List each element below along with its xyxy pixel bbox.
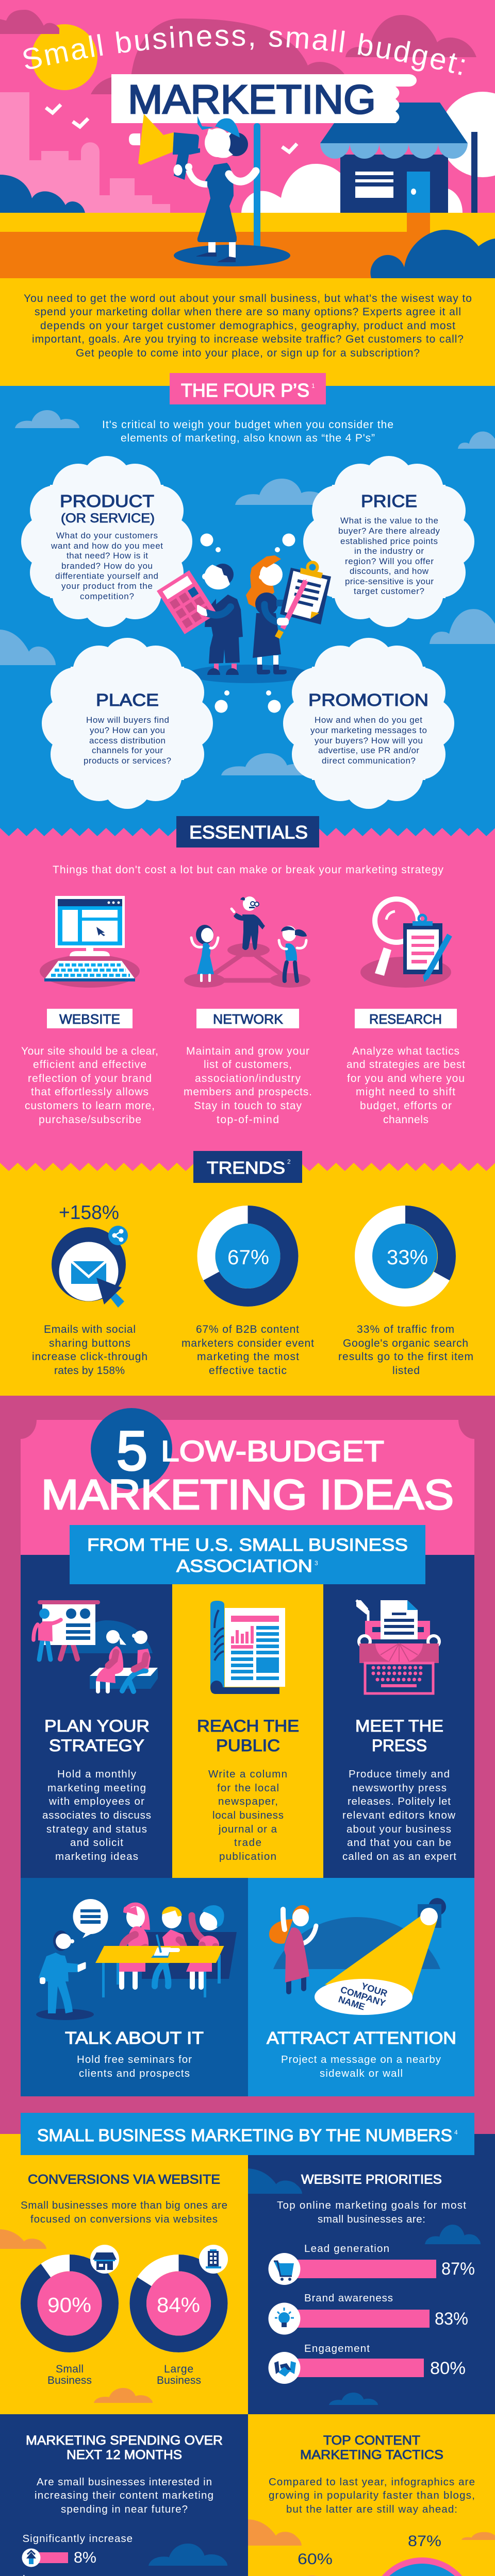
text: spending: Are small businesses interested in	[37, 2476, 212, 2488]
text: research: Analyze what tactics	[352, 1045, 459, 1057]
sub heading: ASSOCIATION	[176, 1556, 312, 1576]
icon: presentation	[34, 1600, 158, 1691]
text: website	[21, 1045, 158, 1126]
birds	[46, 105, 297, 152]
section: by the numbers	[0, 2113, 495, 2576]
heading: the four P's: 1	[311, 382, 315, 389]
cloud: product: that need? How is it	[67, 551, 148, 561]
white clouds behind house	[241, 92, 495, 213]
text: network: Maintain and grow your	[186, 1045, 309, 1057]
label: large business	[157, 2363, 201, 2386]
cloud: promotion: your marketing messages to	[310, 725, 427, 735]
cloud: product: (OR SERVICE)	[61, 511, 155, 526]
sub heading	[70, 1525, 425, 1584]
text: network: Stay in touch to stay	[194, 1100, 302, 1112]
heading: trends: 2	[287, 1158, 291, 1165]
donut chart: 67%: 67%	[227, 1246, 269, 1269]
caption: Google	[338, 1324, 473, 1377]
text: network: top-of-mind	[217, 1114, 279, 1126]
text: priorities: small businesses are:	[318, 2213, 425, 2225]
idea: plan your strategy: marketing meeting	[47, 1782, 146, 1794]
cloud: price: price-sensitive is your	[345, 577, 434, 586]
bubble chart: blogs: 87%	[408, 2533, 441, 2550]
heading: the four P's	[170, 373, 326, 404]
title main word: MARKETING	[128, 76, 376, 122]
text: priorities	[277, 2199, 466, 2225]
banner: by the numbers: 4	[454, 2129, 458, 2136]
city skyline	[0, 92, 170, 213]
spotlight scene: YOUR	[360, 1980, 389, 1999]
idea: reach the public: publication	[219, 1851, 276, 1862]
bar: lead generation	[268, 2243, 475, 2285]
bubble chart: infographics: 60%	[298, 2551, 333, 2568]
text: talk about it: clients and prospects	[79, 2067, 190, 2079]
idea: meet the press: called on as an expert	[342, 1851, 456, 1862]
idea: meet the press: releases. Politely let	[348, 1795, 451, 1807]
text: conversions: Small businesses more than big ones are	[21, 2199, 227, 2211]
label: large business: Business	[157, 2375, 201, 2386]
donut chart: small business: 90%	[47, 2293, 91, 2317]
cloud: price: in the industry or	[354, 546, 424, 556]
icon: network	[184, 896, 310, 988]
stat: +158%: +158%	[59, 1202, 119, 1224]
shop	[320, 103, 468, 213]
text: network: association/industry	[195, 1073, 301, 1084]
caption: emails: Emails with social	[44, 1324, 136, 1335]
icon: office badge	[199, 2245, 228, 2274]
text: tactics	[269, 2476, 475, 2515]
intro text: important, goals. Are you trying to increase website traffic? Get customers to call?	[32, 333, 464, 345]
spotlight scene: NAME	[337, 1994, 366, 2012]
idea: plan your strategy: marketing ideas	[55, 1851, 138, 1862]
cloud: product	[21, 456, 192, 627]
heading: priorities: WEBSITE PRIORITIES	[301, 2172, 442, 2187]
cloud: place: you? How can you	[90, 725, 165, 735]
banner: by the numbers: SMALL BUSINESS MARKETING BY THE NUMBERS	[37, 2126, 452, 2145]
number circle	[91, 1408, 172, 1489]
cloud: price: established price points	[340, 536, 438, 546]
section: essentials	[0, 816, 495, 1163]
text: website: reflection of your brand	[28, 1073, 152, 1084]
donut chart: 67%	[206, 1215, 289, 1297]
essentials subtitle: Things that don't cost a lot but can make or break your marketing strategy	[53, 864, 444, 876]
lamp post	[471, 132, 477, 213]
heading: tactics: TOP CONTENT	[323, 2433, 420, 2448]
blue clouds	[142, 2544, 248, 2576]
bar: significantly increase: 8%	[74, 2549, 96, 2566]
cloud: product: differentiate yourself and	[55, 571, 158, 581]
caption: emails: increase click-through	[32, 1351, 147, 1363]
icon: research	[360, 899, 451, 988]
idea: reach the public: PUBLIC	[216, 1736, 280, 1755]
idea: plan your strategy: and solicit	[70, 1837, 123, 1849]
icon: email	[52, 1226, 128, 1308]
caption: Google: Google's organic search	[343, 1337, 468, 1349]
heading: essentials	[176, 816, 319, 848]
cloud: promotion: How and when do you get	[315, 715, 422, 725]
idea: reach the public: REACH THE	[197, 1717, 299, 1735]
text: website: customers to learn more,	[25, 1100, 155, 1112]
cloud: place: products or services?	[84, 756, 171, 766]
label: network: NETWORK	[213, 1011, 284, 1027]
cloud: product: PRODUCT	[60, 492, 154, 511]
cloud: product: branded? How do you	[61, 561, 153, 571]
idea: meet the press: Produce timely and	[349, 1768, 450, 1780]
text: tactics: but the latter are still way ahead:	[286, 2503, 457, 2515]
bar: brand awareness: Brand awareness	[304, 2292, 393, 2304]
four P's subtitle	[102, 419, 393, 444]
intro text	[24, 293, 472, 359]
idea: plan your strategy: strategy and status	[46, 1823, 147, 1835]
idea: meet the press: PRESS	[372, 1736, 427, 1755]
cloud: place: access distribution	[89, 736, 166, 745]
heading: tactics	[300, 2433, 443, 2462]
panel: marketing spending	[0, 2414, 248, 2576]
cloud: top left	[0, 10, 59, 34]
cloud: price: region? Will you offer	[345, 556, 434, 566]
sub heading: FROM THE U.S. SMALL BUSINESS	[87, 1535, 408, 1555]
heading: talk about it: TALK ABOUT IT	[65, 2028, 204, 2047]
panel: content tactics	[248, 2414, 495, 2576]
text: conversions: focused on conversions via websites	[30, 2213, 218, 2225]
cloud: place: How will buyers find	[86, 715, 169, 725]
text: research	[346, 1045, 465, 1126]
people shadow	[188, 665, 310, 683]
text: website: that effortlessly allows	[31, 1086, 148, 1098]
bar: brand awareness: 83%	[435, 2309, 468, 2329]
label: research	[355, 1009, 457, 1028]
section: the four P's	[0, 373, 495, 837]
text: attract attention: sidewalk or wall	[320, 2067, 403, 2079]
idea: meet the press: and that you can be	[347, 1837, 451, 1849]
four P's subtitle: It's critical to weigh your budget when you consider the	[102, 419, 393, 431]
label: website	[47, 1009, 133, 1028]
text: tactics: growing in popularity faster than blogs,	[269, 2489, 475, 2501]
shadow under woman	[174, 245, 290, 266]
cloud: product: want and how do you meet	[51, 541, 163, 551]
spotlight scene: COMPANY	[339, 1984, 387, 2009]
cloud: top right	[345, 15, 476, 57]
seminar scene	[36, 1899, 237, 2020]
panel: talk about it	[21, 1878, 248, 2096]
intro text: You need to get the word out about your small business, but what's the wisest way to	[24, 293, 472, 304]
idea: meet the press: newsworthy press	[352, 1782, 447, 1794]
cloud: place: channels for your	[92, 745, 163, 755]
cloud: price	[303, 456, 474, 627]
cloud: product: competition?	[80, 591, 134, 601]
cloud: centre	[91, 19, 346, 94]
text: research: budget, efforts or	[360, 1100, 452, 1112]
calculator	[157, 570, 217, 634]
cloud: promotion: your buyers? How will you	[315, 736, 423, 745]
panel: attract attention	[248, 1878, 474, 2096]
cloud: price: discounts, and how	[350, 566, 429, 576]
text: attract attention: Project a message on a nearby	[281, 2054, 441, 2065]
idea: reach the public: Write a column	[208, 1768, 287, 1780]
caption: emails	[32, 1324, 147, 1377]
bar: engagement: Engagement	[304, 2343, 370, 2354]
icon: computer	[40, 896, 140, 988]
bar: engagement	[268, 2343, 466, 2384]
text: network	[184, 1045, 312, 1126]
idea: reach the public	[197, 1717, 299, 1862]
text: website: Your site should be a clear,	[21, 1045, 158, 1057]
section: trends	[0, 1151, 495, 1396]
caption: B2B	[182, 1324, 314, 1377]
four P's subtitle: elements of marketing, also known as “the 4 P's”	[121, 432, 375, 444]
caption: Google: 33% of traffic from	[357, 1324, 454, 1335]
blue clouds	[248, 2168, 481, 2405]
panel: website priorities	[248, 2134, 495, 2414]
cloud: price: target customer?	[354, 586, 424, 596]
caption: B2B: 67% of B2B content	[196, 1324, 299, 1335]
text: network: members and prospects.	[184, 1086, 312, 1098]
label: large business: Large	[164, 2363, 193, 2375]
cloud: price: What is the value to the	[340, 516, 438, 526]
heading: trends: TRENDS	[207, 1158, 285, 1177]
label: small business: Small	[56, 2363, 84, 2375]
donut chart: large business: 84%	[157, 2293, 200, 2317]
idea: plan your strategy: PLAN YOUR	[44, 1717, 150, 1735]
bush right	[370, 230, 495, 278]
intro text: spend your marketing dollar when there are so many options? Experts agree it all	[35, 306, 461, 318]
sun	[31, 24, 97, 90]
sign	[111, 74, 417, 123]
ground	[0, 213, 495, 278]
heading: spending: MARKETING SPENDING OVER	[26, 2433, 223, 2448]
idea: plan your strategy: associates to discuss	[42, 1809, 151, 1821]
zigzag divider	[0, 828, 495, 836]
caption: emails: rates by 158%	[54, 1365, 125, 1377]
section: five ideas	[0, 1396, 495, 2134]
heading: essentials: ESSENTIALS	[189, 822, 308, 843]
label: network	[196, 1009, 299, 1028]
cloud: product: What do your customers	[56, 531, 158, 540]
cloud: place	[42, 638, 213, 809]
bubble chart: blogs	[369, 2533, 474, 2576]
text: spending: spending in near future?	[61, 2503, 188, 2515]
heading: attract attention: ATTRACT ATTENTION	[267, 2028, 456, 2047]
bar: brand awareness	[268, 2292, 468, 2335]
label: research: RESEARCH	[369, 1011, 442, 1027]
text: talk about it: Hold free seminars for	[77, 2054, 192, 2065]
idea: reach the public: journal or a	[218, 1823, 277, 1835]
heading line 1: LOW-BUDGET	[161, 1435, 384, 1468]
banner: by the numbers	[21, 2113, 474, 2155]
heading: spending: NEXT 12 MONTHS	[67, 2448, 182, 2462]
light clouds	[0, 410, 495, 775]
idea: plan your strategy: with employees or	[48, 1795, 144, 1807]
text: tactics: Compared to last year, infographics are	[269, 2476, 475, 2488]
heading: spending	[26, 2433, 223, 2462]
text: talk about it	[77, 2054, 192, 2079]
navy panel	[21, 1555, 474, 1878]
idea: meet the press: about your business	[346, 1823, 451, 1835]
heading: tactics: MARKETING TACTICS	[300, 2448, 443, 2462]
text: research: for you and where you	[347, 1073, 465, 1084]
cloud: promotion	[283, 638, 454, 809]
spotlight scene	[269, 1898, 446, 2015]
text: website: purchase/subscribe	[39, 1114, 141, 1126]
text: research: might need to shift	[356, 1086, 455, 1098]
text: network: list of customers,	[204, 1059, 292, 1071]
caption: emails: sharing buttons	[49, 1337, 130, 1349]
caption: Google: listed	[392, 1365, 420, 1377]
cloud: place: PLACE	[96, 690, 159, 709]
icon: typewriter	[356, 1600, 439, 1693]
zigzag divider	[0, 1163, 495, 1171]
icon: newspaper	[210, 1601, 285, 1694]
icon: shop badge	[90, 2245, 119, 2274]
caption: B2B: marketers consider event	[182, 1337, 314, 1349]
man with calculator	[157, 564, 243, 675]
pink header panel	[21, 1420, 474, 1555]
donut chart: small business	[29, 2263, 110, 2344]
text: spending: increasing their content marketing	[35, 2489, 213, 2501]
heading: the four P's: THE FOUR P’S	[181, 380, 309, 401]
idea: reach the public: local business	[212, 1809, 284, 1821]
woman with megaphone	[129, 114, 256, 262]
cloud: product: your product from the	[61, 581, 153, 591]
text: research: and strategies are best	[346, 1059, 465, 1071]
text: research: channels	[383, 1114, 428, 1126]
idea: meet the press	[342, 1717, 456, 1862]
panel: conversions via website	[0, 2134, 248, 2414]
donut chart: 33%: 33%	[387, 1246, 428, 1269]
hero panel	[0, 0, 495, 278]
idea: meet the press: relevant editors know	[342, 1809, 455, 1821]
cloud: price: PRICE	[361, 492, 417, 511]
caption: B2B: marketing the most	[197, 1351, 299, 1363]
yellow column	[172, 1584, 323, 1878]
orange clouds	[0, 2229, 153, 2403]
donut chart: 33%	[364, 1215, 447, 1297]
intro text: Get people to come into your place, or sign up for a subscription?	[76, 347, 420, 359]
title arc text: Small business, small budget:	[23, 26, 465, 75]
text: conversions	[21, 2199, 227, 2225]
bar: significantly increase: Significantly increase	[23, 2533, 133, 2545]
label: small business	[47, 2363, 92, 2386]
idea: reach the public: for the local	[217, 1782, 279, 1794]
orange clouds	[248, 2519, 495, 2576]
text: spending	[35, 2476, 213, 2515]
heading: conversions: CONVERSIONS VIA WEBSITE	[28, 2172, 220, 2187]
cloud: promotion: PROMOTION	[308, 690, 428, 709]
idea: reach the public: trade	[234, 1837, 261, 1849]
label: small business: Business	[47, 2375, 92, 2386]
cloud: promotion: direct communication?	[322, 756, 416, 766]
bar: engagement: 80%	[430, 2359, 466, 2378]
intro yellow panel	[0, 278, 495, 386]
idea: plan your strategy: Hold a monthly	[57, 1768, 137, 1780]
idea: plan your strategy	[42, 1717, 151, 1862]
caption: Google: results go to the first item	[338, 1351, 473, 1363]
bar: lead generation: 87%	[441, 2259, 475, 2279]
label: website: WEBSITE	[59, 1011, 120, 1027]
sub heading: 3	[315, 1560, 318, 1567]
idea: meet the press: MEET THE	[355, 1717, 443, 1735]
woman with clipboard	[246, 555, 331, 674]
bushes left	[0, 175, 85, 213]
thought bubbles	[200, 534, 295, 713]
text: website: efficient and effective	[33, 1059, 146, 1071]
heading line 2: MARKETING IDEAS	[41, 1471, 454, 1518]
bar: significantly increase	[22, 2533, 133, 2567]
clipboard	[280, 563, 331, 624]
bar: lead generation: Lead generation	[304, 2243, 389, 2255]
idea: reach the public: newspaper,	[218, 1795, 278, 1807]
intro text: depends on your target customer demographics, geography, product and most	[40, 320, 455, 332]
number 5: 5	[117, 1419, 147, 1482]
cloud: promotion: advertise, use PR and/or	[318, 745, 419, 755]
text: attract attention	[281, 2054, 441, 2079]
pole	[254, 123, 260, 258]
text: priorities: Top online marketing goals for most	[277, 2199, 466, 2211]
idea: plan your strategy: STRATEGY	[49, 1736, 144, 1755]
bubble chart: infographics	[269, 2551, 356, 2576]
donut chart: large business	[138, 2263, 219, 2344]
cloud: price: buyer? Are there already	[338, 526, 440, 536]
heading: trends	[193, 1151, 302, 1183]
caption: B2B: effective tactic	[209, 1365, 287, 1377]
